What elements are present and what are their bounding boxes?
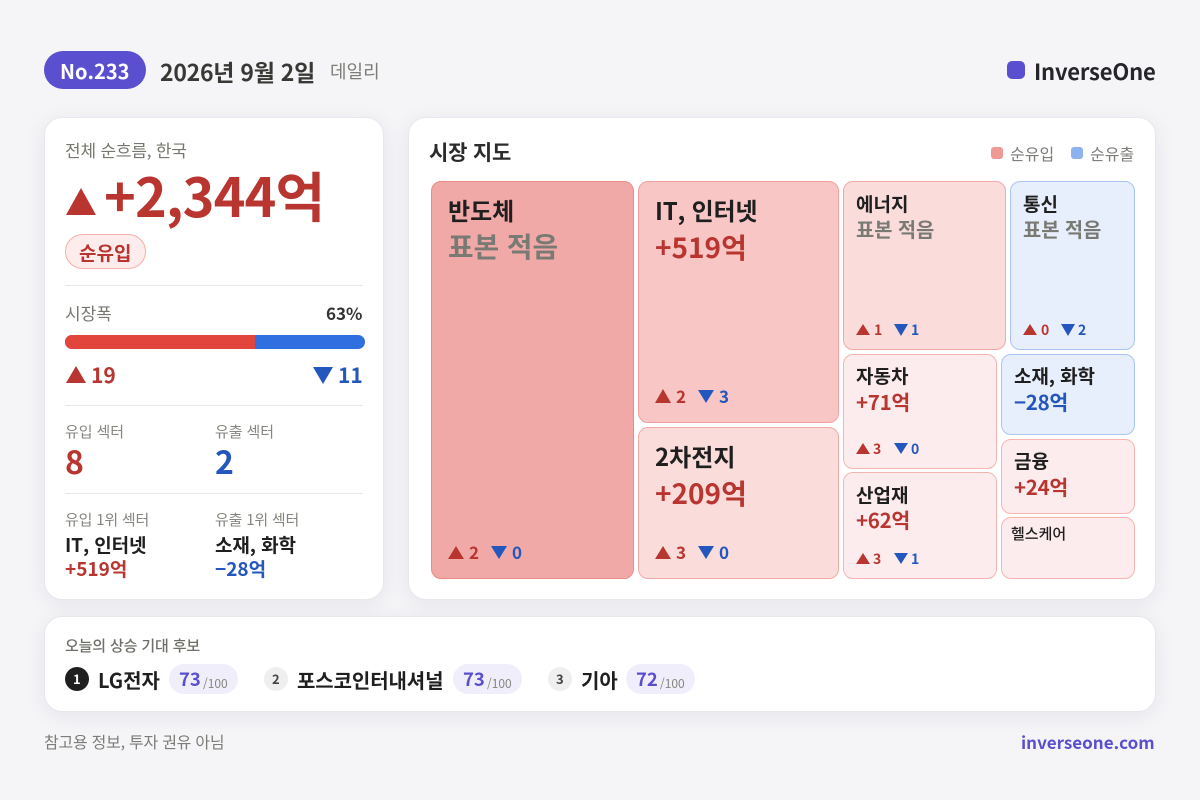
panel: market map [408,117,1156,600]
cell: telecom: 통신 [1023,190,1058,217]
summary label: 전체 순흐름, 한국 [65,137,187,162]
cell: semiconductors: 0 [512,539,522,564]
disclaimer: 참고용 정보, 투자 권유 아님 [44,729,224,753]
top inflow sector: +519억 [65,555,127,582]
brand logo [1007,61,1025,79]
outflow sector count [215,421,274,484]
candidate 2: 2 [272,669,280,688]
top outflow sector: −28억 [215,555,266,582]
candidate 2: /100 [487,675,512,692]
top outflow sector: 유출 1위 섹터 [215,509,299,530]
cell: industrials: 3 [873,549,881,569]
net inflow badge: 순유입 [79,239,131,266]
cell: IT, internet: 2 [676,383,686,408]
cell: semiconductors [431,181,634,579]
cell: batteries: +209억 [655,473,747,513]
inflow sector count [65,421,124,484]
top inflow sector: 유입 1위 섹터 [65,509,149,530]
legend: 순유입 [1010,141,1054,165]
declining count [313,360,363,390]
cell: finance: 금융 [1014,447,1049,474]
net inflow badge [65,234,146,269]
total net flow: +2,344억 [104,154,324,233]
advancing count [66,360,116,390]
top outflow sector: 소재, 화학 [215,531,296,558]
cell: finance: +24억 [1014,471,1068,501]
inflow sector count: 유입 섹터 [65,421,124,442]
cell: semiconductors: 표본 적음 [448,226,558,266]
panel: rising candidates [44,616,1156,712]
cell: finance [1001,439,1135,514]
cell: energy [843,181,1006,350]
candidate 2: 73 [463,666,485,692]
candidate 2 [264,664,522,694]
cell: materials, chemicals: −28억 [1014,386,1068,416]
cell: materials, chemicals: 소재, 화학 [1014,362,1095,389]
candidate 1: 1 [73,669,81,688]
candidate 3: 3 [556,669,564,688]
candidate 1: 73 [179,666,201,692]
candidate 1: /100 [203,675,228,692]
date: 2026년 9월 2일 [160,54,315,88]
cell: telecom [1010,181,1135,350]
cell: telecom: 표본 적음 [1023,214,1101,243]
cell: batteries: 2차전지 [655,438,735,473]
cell: autos: 자동차 [856,362,908,389]
candidate 3: /100 [660,675,685,692]
breadth bar [65,335,365,349]
cell: autos: 0 [911,439,919,459]
cell: autos: +71억 [856,386,910,416]
candidate 2: 포스코인터내셔널 [297,665,443,694]
breadth label: 시장폭 [65,300,112,325]
cell: semiconductors: 반도체 [448,192,514,227]
cell: telecom: 2 [1078,320,1086,340]
top inflow sector [65,509,149,582]
breadth value: 63% [326,300,362,325]
cell: autos: 3 [873,439,881,459]
outflow sector count: 유출 섹터 [215,421,274,442]
cell: telecom: 0 [1041,320,1049,340]
cell: batteries [638,427,839,579]
edition label: 데일리 [330,58,380,84]
legend: 순유출 [1090,141,1134,165]
cell: batteries: 0 [719,539,729,564]
cell: energy: 1 [874,320,882,340]
icon: up triangle [66,188,96,215]
legend [991,141,1134,165]
declining count: 11 [338,360,363,390]
candidate 3: 기아 [581,665,618,694]
candidate 1: LG전자 [98,665,160,694]
candidate 1 [65,664,238,694]
market map heading: 시장 지도 [429,137,511,167]
candidates heading: 오늘의 상승 기대 후보 [65,635,200,656]
cell: energy: 표본 적음 [856,214,934,243]
cell: industrials: 1 [911,549,919,569]
cell: industrials [843,472,997,579]
candidate 3: 72 [636,666,658,692]
advancing count: 19 [91,360,116,390]
cell: IT, internet: +519억 [655,227,747,267]
issue number badge: No.233 [60,56,129,85]
cell: IT, internet [638,181,839,423]
cell: healthcare: 헬스케어 [1011,523,1066,544]
panel: market summary [44,117,384,600]
brand name: InverseOne [1034,55,1156,87]
candidate 3 [548,664,695,694]
cell: healthcare [1001,517,1135,579]
top outflow sector [215,509,299,582]
website: inverseone.com [1021,729,1155,754]
cell: industrials: +62억 [856,504,910,534]
cell: IT, internet: IT, 인터넷 [655,192,757,227]
inflow sector count: 8 [65,438,84,484]
cell: materials, chemicals [1001,354,1135,435]
cell: semiconductors: 2 [469,539,479,564]
cell: IT, internet: 3 [719,383,729,408]
issue number badge [44,51,146,89]
cell: industrials: 산업재 [856,481,908,508]
cell: batteries: 3 [676,539,686,564]
top inflow sector: IT, 인터넷 [65,531,146,558]
cell: energy: 에너지 [856,190,908,217]
cell: autos [843,354,997,469]
outflow sector count: 2 [215,438,234,484]
cell: energy: 1 [911,320,919,340]
